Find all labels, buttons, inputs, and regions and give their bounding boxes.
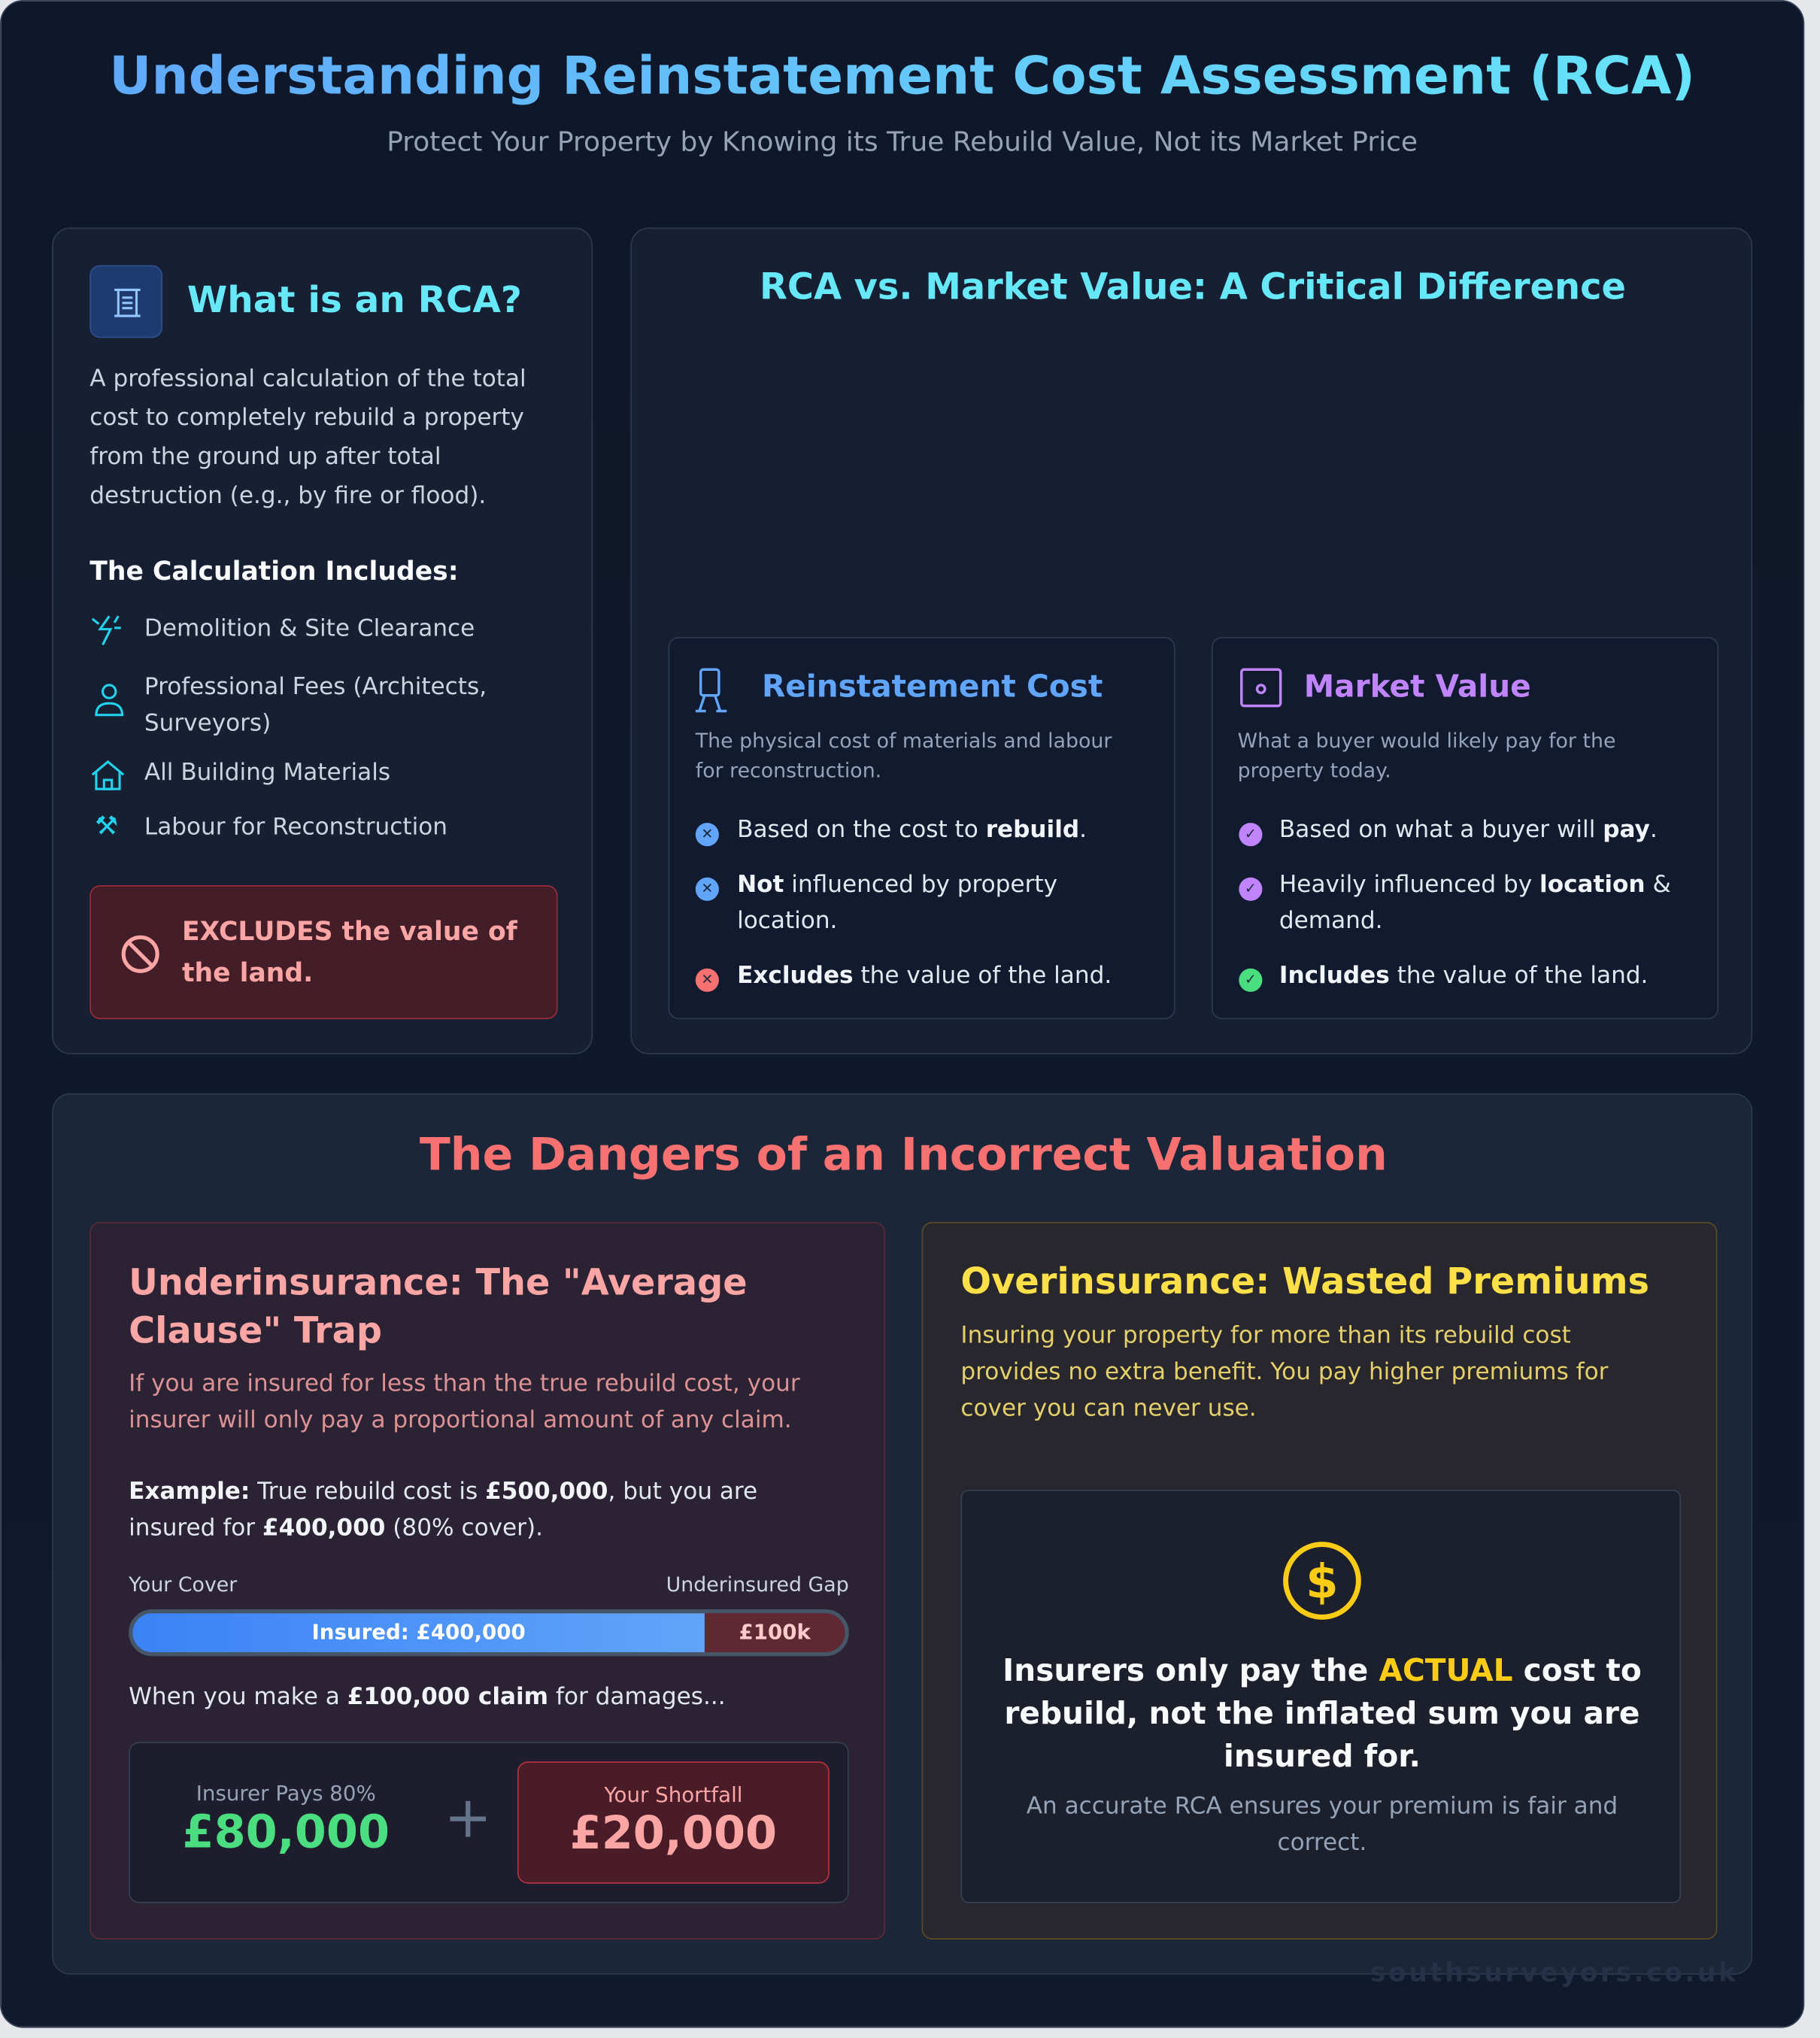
callout: excludes land (89, 885, 558, 1019)
list: includes: Surveyors) (144, 710, 271, 737)
panel: RCA vs market value (630, 227, 1752, 1054)
list: includes: Professional Fees (Architects, (144, 673, 487, 701)
result box: Your Shortfall (604, 1782, 742, 1807)
icon: dollar (1283, 1542, 1361, 1620)
icon: easel (695, 668, 726, 713)
card: underinsurance: Underinsurance: The "Average Clause" Trap (129, 1261, 748, 1352)
card: market value (1212, 637, 1718, 1019)
list: includes: All Building Materials (144, 759, 390, 787)
card: underinsurance: Example: True rebuild cost is £500,000, but you are insured for £400,000 (80% cover). (129, 1478, 757, 1542)
heading: What is an RCA? (187, 278, 522, 321)
card: overinsurance: Insuring your property for more than its rebuild cost provides no extra benefit. You pay higher premiums for cover you can never use. (960, 1322, 1608, 1422)
heading: RCA vs. Market Value: A Critical Difference (760, 265, 1626, 308)
card: market value: ✓ (1245, 971, 1257, 988)
card: reinstatement cost: Not influenced by property location. (737, 871, 1057, 935)
icon: house (92, 760, 125, 790)
callout box: Insurers only pay the ACTUAL cost to rebuild, not the inflated sum you are insured for. (1003, 1652, 1642, 1774)
list: includes: Labour for Reconstruction (144, 814, 447, 841)
list: includes (92, 615, 487, 841)
card: reinstatement cost: ✕ (701, 880, 713, 897)
card: market value: Includes the value of the land. (1279, 962, 1648, 989)
list: includes: Demolition & Site Clearance (144, 615, 475, 642)
card: market value: What a buyer would likely pay for the property today. (1238, 729, 1615, 783)
result box: £80,000 (182, 1807, 390, 1859)
callout box (960, 1490, 1681, 1903)
icon: tool: ⚒ (95, 810, 118, 841)
card: reinstatement cost: Excludes the value of the land. (737, 962, 1112, 989)
card: underinsurance (89, 1222, 885, 1939)
icon: person (95, 684, 123, 716)
card: underinsurance: When you make a £100,000 claim for damages... (129, 1683, 726, 1711)
card: market value: Heavily influenced by location & demand. (1279, 871, 1671, 935)
icon: tablet (1240, 668, 1282, 707)
icon: demolition (92, 615, 121, 645)
subtitle: Protect Your Property by Knowing its True Rebuild Value, Not its Market Price (387, 126, 1418, 157)
callout: excludes land: EXCLUDES the value of the land. (182, 915, 517, 988)
title: Understanding Reinstatement Cost Assessment (RCA) (109, 47, 1695, 107)
bar chart: cover: Insured: £400,000 (311, 1620, 526, 1645)
panel: dangers (52, 1093, 1752, 1975)
result box: £20,000 (570, 1808, 777, 1861)
subheading: The Calculation Includes: (89, 555, 459, 587)
heading: The Dangers of an Incorrect Valuation (420, 1130, 1388, 1181)
card: overinsurance: Overinsurance: Wasted Premiums (960, 1260, 1649, 1303)
card: reinstatement cost: The physical cost of materials and labour for reconstruction. (696, 729, 1112, 783)
card: market value: ✓ (1245, 880, 1257, 897)
watermark: southsurveyors.co.uk (1370, 1956, 1738, 1988)
bar chart: cover: £100k (739, 1620, 811, 1645)
card: reinstatement cost: ✕ (701, 826, 713, 842)
card: reinstatement cost (668, 637, 1175, 1019)
icon: dollar: $ (1306, 1554, 1339, 1609)
callout box: An accurate RCA ensures your premium is fair and correct. (1027, 1793, 1618, 1856)
result box: + (444, 1785, 492, 1851)
result box: Insurer Pays 80% (196, 1781, 376, 1806)
bar chart: cover: Your Cover (129, 1573, 237, 1597)
icon: building (89, 265, 162, 338)
bar chart: cover (129, 1573, 849, 1656)
card: reinstatement cost: ✕ (701, 971, 713, 988)
card: market value: Based on what a buyer will pay. (1279, 817, 1658, 844)
card: reinstatement cost: Based on the cost to rebuild. (737, 817, 1087, 844)
bar chart: cover: Underinsured Gap (666, 1573, 849, 1597)
result box (129, 1742, 849, 1903)
card: market value: ✓ (1245, 826, 1257, 842)
card: market value: Market Value (1304, 668, 1531, 705)
card: reinstatement cost: Reinstatement Cost (762, 668, 1103, 705)
card: underinsurance: If you are insured for less than the true rebuild cost, your insurer will only pay a proportional amount of any claim. (129, 1370, 800, 1434)
text: definition: A professional calculation of the total cost to completely rebuild a property from the ground up after total destruction (e.g., by fire or flood). (89, 365, 526, 510)
card: overinsurance (922, 1222, 1717, 1939)
panel: what is an RCA (52, 227, 593, 1054)
